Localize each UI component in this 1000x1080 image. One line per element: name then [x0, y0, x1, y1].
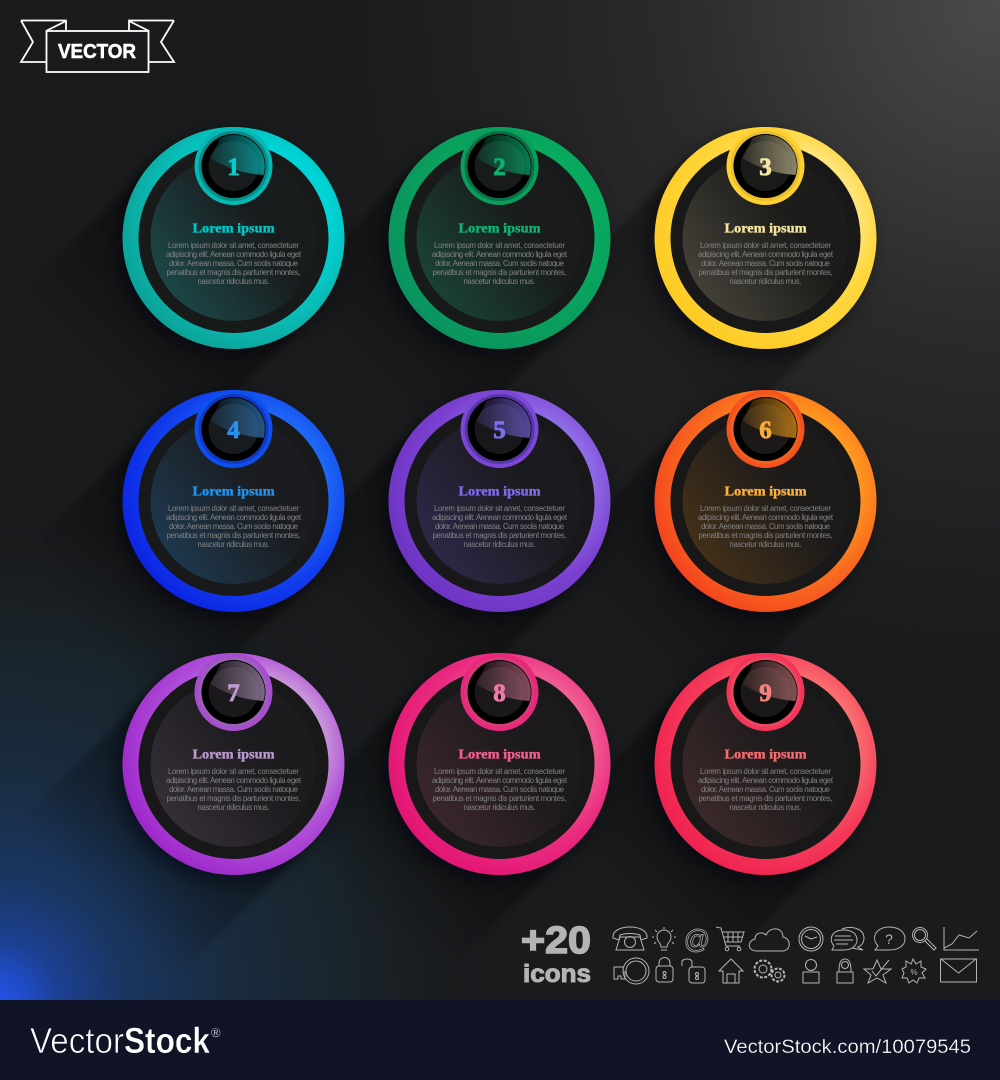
body text: nascetur ridiculus mus.	[730, 277, 802, 286]
body text: nascetur ridiculus mus.	[464, 540, 536, 549]
inner disc	[682, 418, 848, 584]
icon: open padlock	[682, 959, 705, 983]
body text: Lorem ipsum dolor sit amet, consectetuer	[168, 504, 299, 513]
body text: Lorem ipsum dolor sit amet, consectetuer	[700, 241, 831, 250]
body text: nascetur ridiculus mus.	[198, 803, 270, 812]
body text: adipiscing elit. Aenean commodo ligula eget	[698, 776, 834, 785]
ribbon badge: VECTOR: VECTOR	[58, 41, 137, 63]
title: Lorem ipsum	[192, 484, 275, 498]
body text: penatibus et magnis dis parturient montes,	[698, 531, 832, 540]
panel: circle 2 green	[388, 127, 610, 349]
body text: penatibus et magnis dis parturient montes,	[432, 268, 566, 277]
outer ring	[122, 390, 344, 612]
inner disc	[682, 681, 848, 847]
icon: gears	[754, 960, 784, 982]
icon: telephone	[613, 927, 647, 950]
body text: dolor. Aenean massa. Cum sociis natoque	[169, 522, 298, 531]
outer ring	[654, 390, 876, 612]
icon: chat bubbles	[831, 927, 864, 950]
icon: percent burst	[902, 959, 926, 983]
icon: man	[803, 960, 819, 983]
body text: penatibus et magnis dis parturient montes,	[166, 531, 300, 540]
number: 6	[759, 417, 772, 444]
body text: Lorem ipsum dolor sit amet, consectetuer	[434, 767, 565, 776]
outer ring	[388, 390, 610, 612]
body text: Lorem ipsum dolor sit amet, consectetuer	[700, 767, 831, 776]
number badge	[462, 655, 536, 729]
body text: Lorem ipsum dolor sit amet, consectetuer	[434, 241, 565, 250]
title: Lorem ipsum	[458, 484, 541, 498]
VectorStock logo: Stock	[124, 1020, 211, 1061]
panel: circle 7 magenta violet	[122, 653, 344, 875]
body text: penatibus et magnis dis parturient montes,	[166, 268, 300, 277]
panel: circle 1 teal	[122, 127, 344, 349]
title: Lorem ipsum	[458, 746, 541, 762]
body text: dolor. Aenean massa. Cum sociis natoque	[701, 259, 830, 268]
outer ring	[388, 653, 610, 875]
number badge	[728, 129, 802, 203]
number badge	[728, 655, 802, 729]
body text: adipiscing elit. Aenean commodo ligula eget	[698, 513, 834, 522]
panel: circle 6 orange	[654, 390, 876, 612]
number badge	[196, 392, 270, 466]
icon: at sign: @	[684, 924, 710, 954]
body text: Lorem ipsum dolor sit amet, consectetuer	[168, 767, 299, 776]
body text: adipiscing elit. Aenean commodo ligula eget	[432, 776, 568, 785]
icon: question bubble: ?	[885, 931, 893, 947]
body text: penatibus et magnis dis parturient montes,	[698, 794, 832, 803]
outer ring	[388, 127, 610, 349]
body text: penatibus et magnis dis parturient montes,	[432, 531, 566, 540]
number badge	[462, 392, 536, 466]
icon: star with check	[864, 960, 891, 983]
inner disc	[150, 418, 316, 584]
title: Lorem ipsum	[458, 220, 541, 236]
body text: nascetur ridiculus mus.	[464, 277, 536, 286]
VectorStock logo: ®	[211, 1025, 221, 1040]
body text: dolor. Aenean massa. Cum sociis natoque	[435, 522, 564, 531]
body text: adipiscing elit. Aenean commodo ligula eget	[166, 776, 302, 785]
body text: dolor. Aenean massa. Cum sociis natoque	[169, 259, 298, 268]
icon: shopping cart	[716, 927, 744, 951]
body text: adipiscing elit. Aenean commodo ligula eget	[432, 250, 568, 259]
number badge	[196, 655, 270, 729]
number: 4	[227, 417, 240, 444]
ribbon badge: VECTOR	[21, 20, 174, 72]
icon: clock	[799, 927, 823, 951]
outer ring	[654, 127, 876, 349]
outer ring	[122, 127, 344, 349]
number: 1	[227, 154, 240, 181]
panel: circle 8 pink	[388, 653, 610, 875]
number badge	[728, 392, 802, 466]
VectorStock logo	[30, 1020, 221, 1061]
inner disc	[150, 155, 316, 321]
outer ring	[654, 653, 876, 875]
title: Lorem ipsum	[192, 220, 275, 236]
number: 7	[227, 680, 240, 707]
body text: dolor. Aenean massa. Cum sociis natoque	[701, 522, 830, 531]
icon: line chart	[944, 927, 979, 950]
body text: nascetur ridiculus mus.	[730, 803, 802, 812]
inner disc	[416, 681, 582, 847]
number: 2	[493, 154, 506, 181]
inner disc	[150, 681, 316, 847]
image id: VectorStock.com/10079545	[724, 1037, 971, 1058]
outer ring	[122, 653, 344, 875]
panel: circle 5 violet	[388, 390, 610, 612]
body text: adipiscing elit. Aenean commodo ligula eget	[166, 250, 302, 259]
icon: house	[719, 959, 743, 983]
icon: envelope	[940, 959, 976, 982]
number badge	[462, 129, 536, 203]
number badge	[196, 129, 270, 203]
number: 5	[493, 417, 506, 444]
body text: Lorem ipsum dolor sit amet, consectetuer	[168, 241, 299, 250]
title: Lorem ipsum	[724, 220, 807, 236]
icon: light bulb	[652, 927, 676, 950]
body text: dolor. Aenean massa. Cum sociis natoque	[435, 259, 564, 268]
body text: nascetur ridiculus mus.	[198, 277, 270, 286]
+20 icons label: +20	[521, 920, 591, 962]
body text: Lorem ipsum dolor sit amet, consectetuer	[434, 504, 565, 513]
body text: nascetur ridiculus mus.	[198, 540, 270, 549]
panel: circle 4 blue	[122, 390, 344, 612]
icon: closed padlock	[656, 958, 673, 982]
body text: dolor. Aenean massa. Cum sociis natoque	[701, 785, 830, 794]
title: Lorem ipsum	[724, 484, 807, 498]
panel: circle 9 red	[654, 653, 876, 875]
VectorStock logo: Vector	[30, 1020, 124, 1061]
body text: penatibus et magnis dis parturient montes,	[432, 794, 566, 803]
number: 8	[493, 680, 506, 707]
inner disc	[416, 418, 582, 584]
inner disc	[682, 155, 848, 321]
body text: nascetur ridiculus mus.	[464, 803, 536, 812]
title: Lorem ipsum	[192, 746, 275, 762]
body text: penatibus et magnis dis parturient montes,	[698, 268, 832, 277]
icon set	[613, 924, 979, 984]
inner disc	[416, 155, 582, 321]
footer band	[0, 1000, 1000, 1080]
body text: adipiscing elit. Aenean commodo ligula eget	[698, 250, 834, 259]
number: 9	[759, 680, 772, 707]
body text: Lorem ipsum dolor sit amet, consectetuer	[700, 504, 831, 513]
+20 icons label: icons	[523, 960, 591, 988]
body text: dolor. Aenean massa. Cum sociis natoque	[435, 785, 564, 794]
body text: adipiscing elit. Aenean commodo ligula eget	[166, 513, 302, 522]
body text: penatibus et magnis dis parturient montes,	[166, 794, 300, 803]
panel: circle 3 yellow	[654, 127, 876, 349]
icon: magnifier	[912, 928, 936, 950]
icon: key	[614, 958, 649, 984]
number: 3	[759, 154, 772, 181]
+20 icons label	[521, 920, 591, 988]
body text: nascetur ridiculus mus.	[730, 540, 802, 549]
icon: cloud	[749, 929, 789, 951]
icon: woman	[837, 959, 853, 983]
body text: dolor. Aenean massa. Cum sociis natoque	[169, 785, 298, 794]
title: Lorem ipsum	[724, 746, 807, 762]
icon: question bubble	[875, 927, 905, 950]
body text: adipiscing elit. Aenean commodo ligula eget	[432, 513, 568, 522]
icon: percent burst: %	[910, 968, 918, 977]
